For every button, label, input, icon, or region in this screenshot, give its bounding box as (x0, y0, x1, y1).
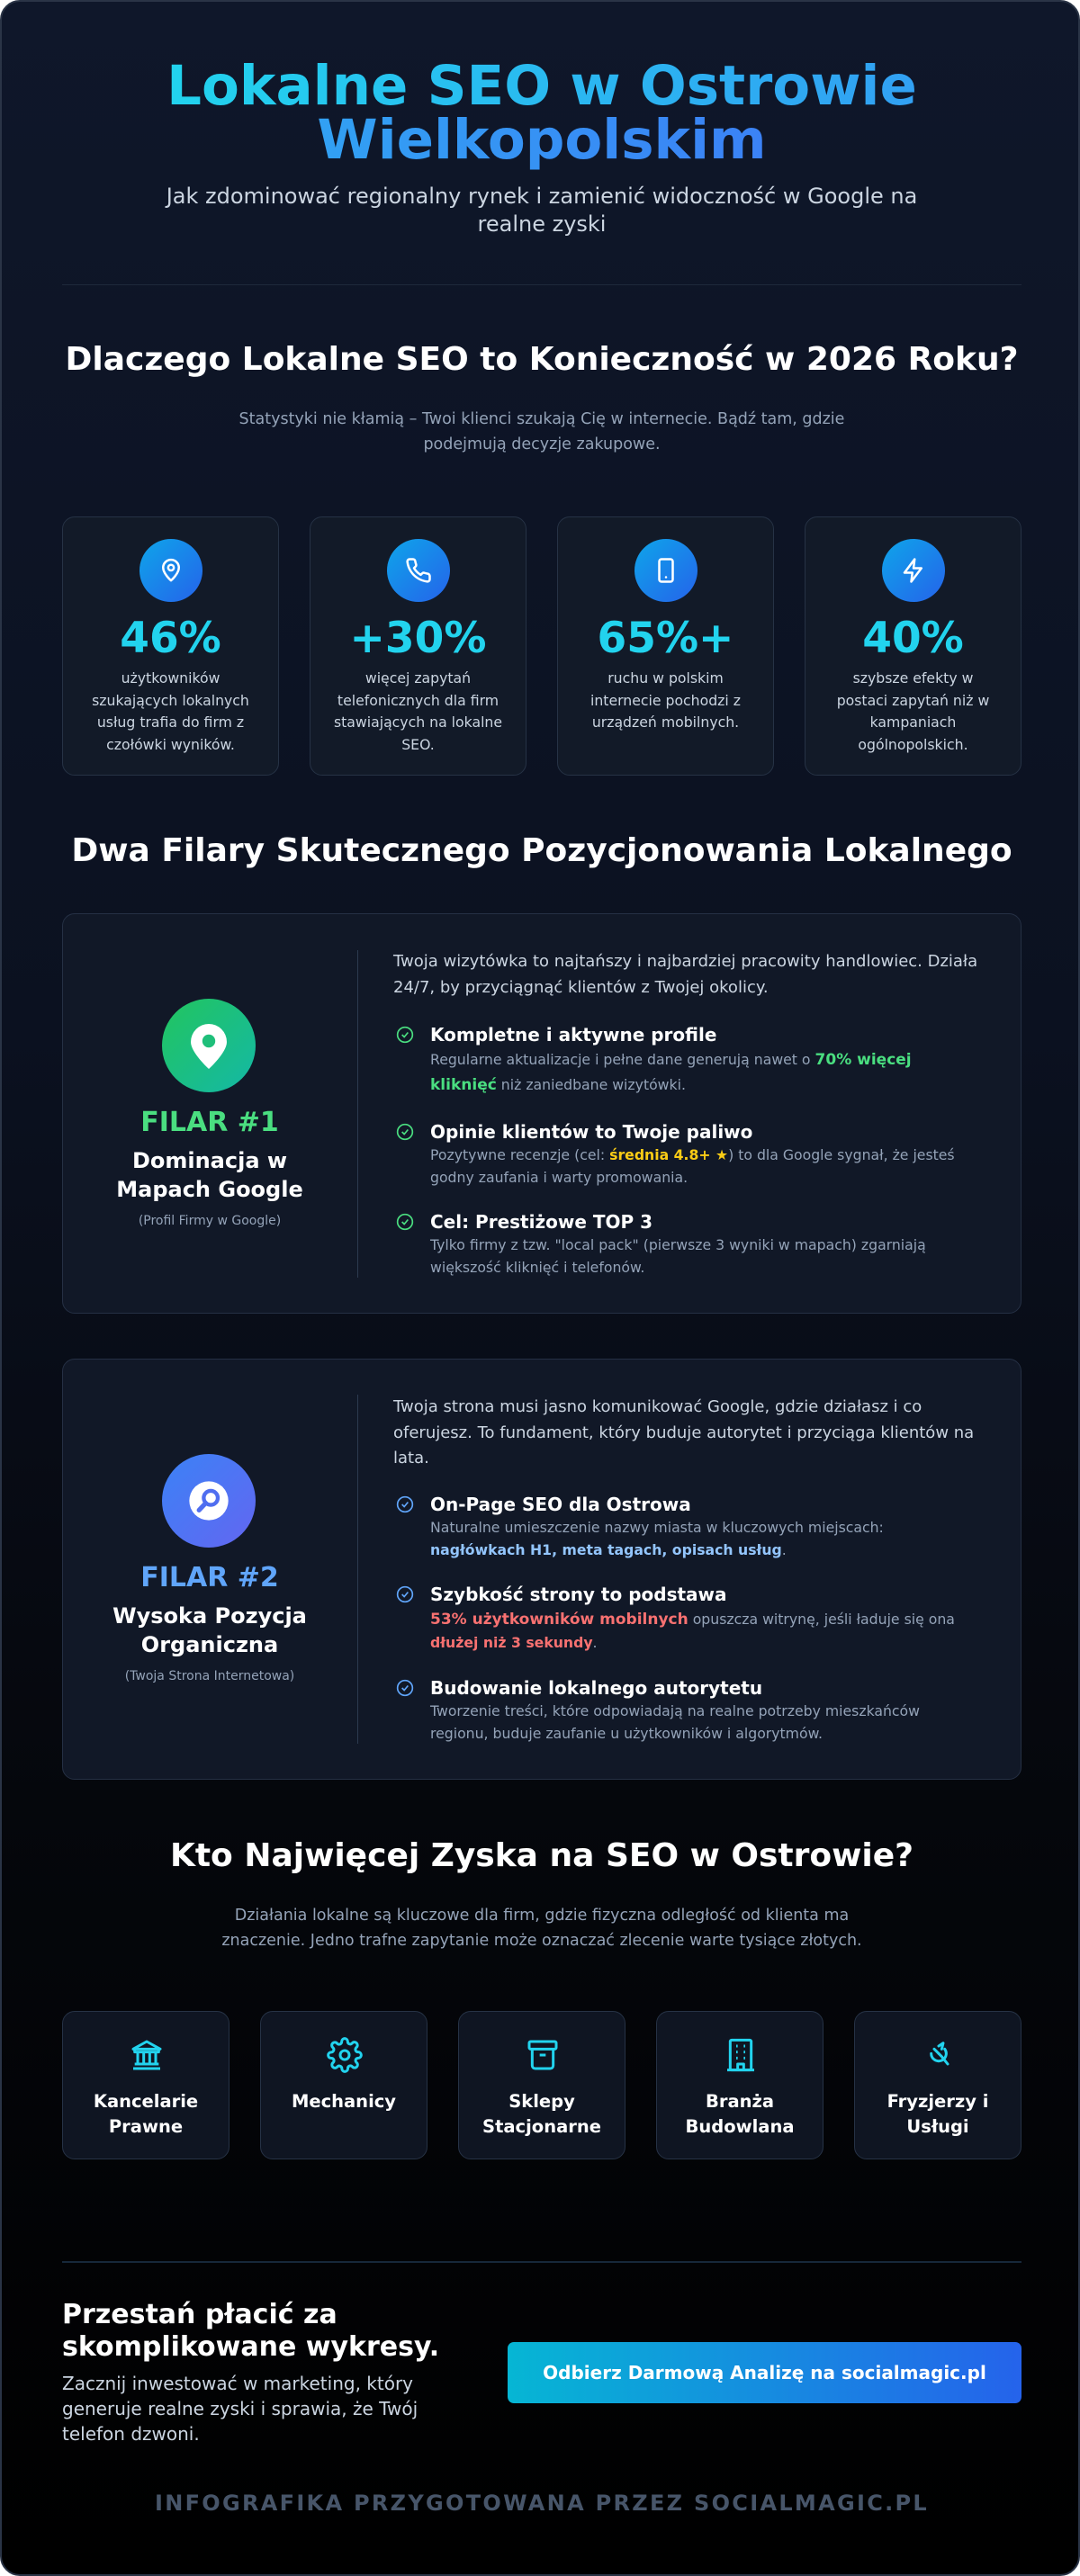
industry card: construction (656, 2011, 824, 2159)
icon: building (727, 2039, 754, 2071)
icon: archive box (527, 2041, 558, 2069)
stat card 3 (557, 516, 774, 776)
icon: gear (327, 2037, 363, 2073)
text: Cel: Prestiżowe TOP 3 (430, 1211, 652, 1233)
heading: who benefits: Kto Najwięcej Zyska na SEO w Ostrowie? (170, 1837, 914, 1874)
subtitle: Jak zdominować regionalny rynek i zamienić widoczność w Google na realne zyski (166, 184, 917, 237)
stat card 4: szybsze efekty w postaci zapytań niż w kampaniach ogólnopolskich. (837, 669, 989, 752)
text: Opinie klientów to Twoje paliwo (430, 1121, 752, 1143)
item: top 3 (396, 1213, 414, 1231)
icon: lightning (882, 539, 945, 602)
icon: courthouse (131, 2041, 162, 2069)
pillar 2 title (112, 1603, 307, 1657)
pillar 2 intro: Twoja strona musi jasno komunikować Google, gdzie działasz i co oferujesz. To fundament, który buduje autorytet i przyciąga klientów na lata. (393, 1397, 974, 1468)
stat card 3: ruchu w polskim internecie pochodzi z urządzeń mobilnych. (590, 669, 741, 731)
industry card: construction: Budowlana (686, 2116, 794, 2137)
stat card 2 (310, 516, 526, 776)
text: Tylko firmy z tzw. "local pack" (pierwsze 3 wyniki w mapach) zgarniają większość kliknięć i telefonów. (430, 1236, 926, 1276)
stat card 3: 65%+ (598, 614, 734, 663)
item: authority (396, 1679, 414, 1697)
item: reviews (396, 1123, 414, 1141)
icon: smartphone (634, 539, 698, 602)
CTA button: Odbierz Darmową Analizę na socialmagic.pl (543, 2362, 986, 2383)
title (166, 54, 917, 172)
stat card 1 (62, 516, 279, 776)
pillar 1 title: Dominacja w (132, 1148, 287, 1173)
item: complete profiles (396, 1026, 414, 1044)
item: speed (396, 1585, 414, 1603)
stat card 4: 40% (862, 614, 964, 663)
pillar 1 caption: (Profil Firmy w Google) (139, 1214, 281, 1228)
text: On-Page SEO dla Ostrowa (430, 1494, 691, 1515)
pillar 1 title (116, 1148, 303, 1202)
pillar 2 title: Organiczna (141, 1632, 278, 1657)
text: Tworzenie treści, które odpowiadają na realne potrzeby mieszkańców regionu, buduje zaufanie u użytkowników i algorytmów. (430, 1702, 920, 1742)
pillar 2 caption: (Twoja Strona Internetowa) (125, 1669, 294, 1683)
text: 53% użytkowników mobilnych opuszcza witrynę, jeśli ładuje się ona dłużej niż 3 sekundy. (430, 1611, 955, 1651)
icon: map pin (140, 539, 202, 602)
panel: pillar 2 (62, 1359, 1022, 1780)
icon: service (930, 2042, 950, 2066)
industry card: hairdressers: Fryzjerzy i (887, 2091, 988, 2112)
icon: phone (387, 539, 450, 602)
intro text: who benefits: Działania lokalne są kluczowe dla firm, gdzie fizyczna odległość od klienta ma znaczenie. Jedno trafne zapytanie może oznaczać zlecenie warte tysiące złotych. (221, 1907, 862, 1950)
industry card: law firms: Kancelarie (94, 2091, 198, 2112)
industry card: construction: Branża (706, 2091, 774, 2112)
panel: pillar 1 (62, 913, 1022, 1314)
CTA button (508, 2342, 1022, 2403)
heading: why local SEO: Dlaczego Lokalne SEO to Konieczność w 2026 Roku? (65, 341, 1018, 378)
icon: green map pin (162, 999, 256, 1092)
title: Lokalne SEO w Ostrowie (166, 54, 917, 118)
stat card 4 (805, 516, 1022, 776)
item: on-page (396, 1495, 414, 1513)
stat card 2: więcej zapytań telefonicznych dla firm stawiających na lokalne SEO. (334, 669, 502, 752)
stat card 1: 46% (120, 614, 221, 663)
industry card: hairdressers (854, 2011, 1022, 2159)
icon: search (162, 1454, 256, 1548)
title: Wielkopolskim (317, 108, 767, 172)
text: Regularne aktualizacje i pełne dane generują nawet o 70% więcej kliknięć niż zaniedbane wizytówki. (430, 1051, 912, 1094)
pillar 1 title: Mapach Google (116, 1177, 303, 1202)
industry card: law firms (62, 2011, 230, 2159)
industry card: shops: Stacjonarne (482, 2116, 601, 2137)
industry card: law firms: Prawne (109, 2116, 183, 2137)
footer credit: INFOGRAFIKA PRZYGOTOWANA PRZEZ SOCIALMAGIC.PL (155, 2491, 929, 2516)
industry card: hairdressers: Usługi (906, 2116, 969, 2137)
pillar 2 label: FILAR #2 (140, 1562, 279, 1593)
text: Naturalne umieszczenie nazwy miasta w kluczowych miejscach: nagłówkach H1, meta tagach, opisach usług. (430, 1519, 884, 1558)
intro text: statistics: Statystyki nie kłamią – Twoi klienci szukają Cię w internecie. Bądź tam, gdzie podejmują decyzje zakupowe. (239, 410, 844, 453)
text: Kompletne i aktywne profile (430, 1024, 716, 1046)
text: Budowanie lokalnego autorytetu (430, 1677, 762, 1699)
industry card: shops (458, 2011, 626, 2159)
stat card 1: użytkowników szukających lokalnych usług trafia do firm z czołówki wyników. (92, 669, 249, 752)
stat card 2: +30% (350, 614, 486, 663)
industry card: shops: Sklepy (508, 2091, 575, 2112)
text: Pozytywne recenzje (cel: średnia 4.8+ ★) to dla Google sygnał, że jesteś godny zaufania i warty promowania. (430, 1146, 955, 1186)
pillar 1 label: FILAR #1 (140, 1107, 279, 1138)
text: Szybkość strony to podstawa (430, 1584, 727, 1605)
pillar 1 intro: Twoja wizytówka to najtańszy i najbardziej pracowity handlowiec. Działa 24/7, by przyciągnąć klientów z Twojej okolicy. (393, 952, 977, 997)
CTA text: Zacznij inwestować w marketing, który generuje realne zyski i sprawia, że Twój telefon dzwoni. (62, 2373, 418, 2445)
heading: two pillars: Dwa Filary Skutecznego Pozycjonowania Lokalnego (71, 832, 1012, 869)
industry card: mechanics (260, 2011, 428, 2159)
industry card: mechanics: Mechanicy (292, 2091, 396, 2112)
pillar 2 title: Wysoka Pozycja (112, 1603, 307, 1629)
CTA heading: Przestań płacić za skomplikowane wykresy. (62, 2299, 439, 2363)
